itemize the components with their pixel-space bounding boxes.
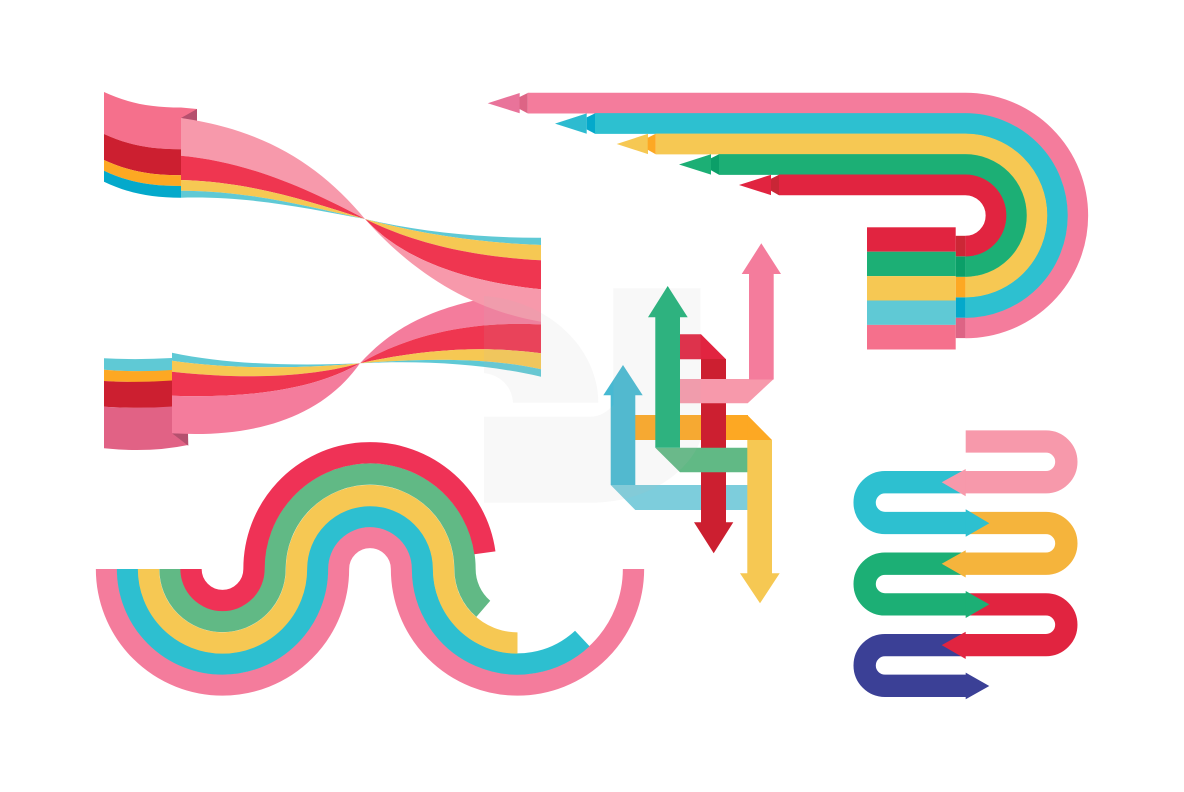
- upper ribbon back section: [104, 92, 197, 198]
- rainbow U-turn arrows: [488, 93, 1078, 350]
- wave band: yellow: [148, 496, 518, 643]
- serpentine arrows: [865, 442, 1066, 699]
- wave band: red: [191, 453, 485, 601]
- U-turn band: green: [679, 154, 1016, 277]
- U-turn band: yellow: [617, 134, 1037, 297]
- lower ribbon back section: [104, 358, 188, 450]
- serpentine arrow: green: [865, 564, 989, 618]
- U-turn band: pink: [488, 93, 1078, 338]
- U-turn band: red: [739, 175, 996, 256]
- twisted ribbon: upper: [104, 92, 541, 322]
- wave band: cyan: [128, 516, 582, 664]
- green arrow: [648, 286, 748, 472]
- blue arrow lower band: [611, 485, 748, 510]
- serpentine arrow: amber: [942, 523, 1066, 578]
- woven knot arrows: [603, 243, 781, 603]
- red arrow upper band: [680, 334, 726, 359]
- U-turn band: cyan: [555, 113, 1057, 318]
- serpentine arrow: red: [942, 604, 1066, 659]
- upper ribbon front left section: [181, 118, 365, 219]
- red arrow shaft and head: [694, 359, 733, 553]
- faint watermark: [484, 288, 700, 503]
- U-turn front stacked block: [867, 227, 956, 350]
- twisted ribbon: lower: [104, 290, 541, 450]
- serpentine arrow: navy: [865, 645, 989, 699]
- wave band: pink: [106, 538, 634, 685]
- yellow arrow: [740, 415, 780, 603]
- orange band: [630, 415, 748, 440]
- lower ribbon front right section: [360, 290, 541, 377]
- wavy rainbow S-curve: [106, 453, 634, 685]
- pink arrow: [680, 243, 781, 403]
- serpentine arrow: pink: [942, 442, 1066, 496]
- wave band: green: [170, 474, 483, 622]
- blue arrow: [603, 365, 643, 485]
- upper ribbon front right section: [365, 219, 541, 322]
- lower ribbon front left section: [172, 353, 360, 434]
- serpentine arrow: cyan: [865, 482, 989, 537]
